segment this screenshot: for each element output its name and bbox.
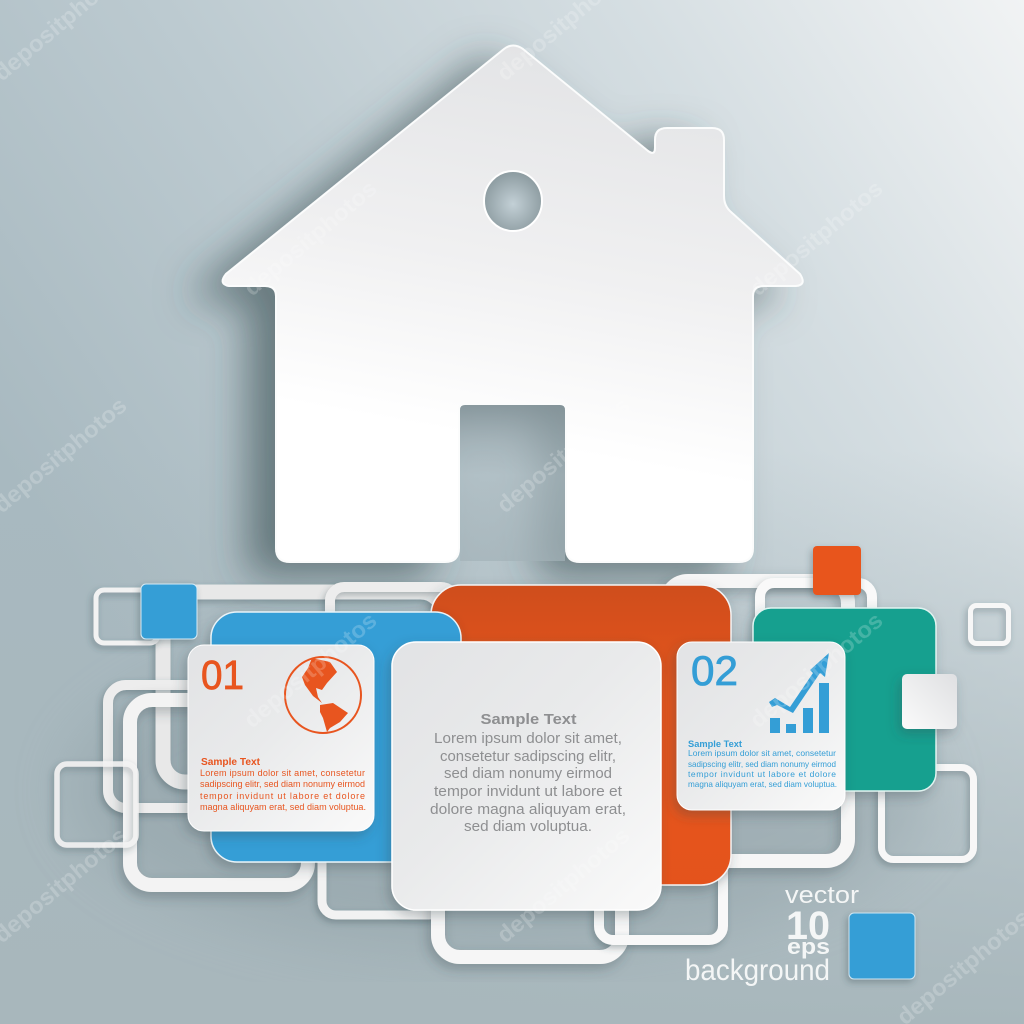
house: [223, 46, 803, 562]
background lower tone: [0, 450, 1024, 1024]
panel: orange: [431, 585, 731, 885]
text block: grey body: tempor invidunt ut labore et: [434, 784, 622, 800]
text block: grey body: sed diam voluptua.: [464, 819, 592, 835]
card 01: [188, 645, 374, 831]
card 02: [677, 642, 845, 810]
badge: vector 10 eps background: 10: [786, 904, 830, 948]
text block: grey body: dolore magna aliquyam erat,: [430, 802, 626, 818]
panel: blue: [211, 612, 461, 862]
rings behind the panels: [96, 581, 1008, 957]
number 01: 01: [201, 652, 244, 698]
heading: sample text grey: Sample Text: [480, 712, 577, 728]
watermarks: depositphotos: [745, 175, 888, 301]
card centre: [392, 642, 661, 910]
badge: vector 10 eps background: vector: [785, 882, 859, 909]
badge: vector 10 eps background: background: [685, 954, 830, 987]
ring: small left overlay: [57, 764, 136, 845]
badge: vector 10 eps background: eps: [787, 934, 830, 959]
ring: bottom centre: [438, 780, 622, 957]
text block: grey body: [430, 731, 626, 835]
ring: centre lower: [322, 770, 443, 915]
ring: small top left: [96, 590, 158, 643]
ring: lower right: [882, 768, 974, 860]
text block: blue body: tempor invidunt ut labore et dolore: [688, 769, 836, 779]
text block: orange body: sadipscing elitr, sed diam nonumy eirmod: [200, 779, 365, 789]
square: blue badge: [849, 913, 915, 979]
house door opening: [460, 405, 565, 561]
square: orange small: [813, 546, 861, 595]
icon: globe: [285, 657, 361, 733]
watermarks: depositphotos: [745, 607, 888, 733]
text block: grey body: sed diam nonumy eirmod: [444, 766, 612, 782]
ring: right large: [666, 581, 848, 861]
house round window: [484, 171, 542, 231]
text block: grey body: consetetur sadipscing elitr,: [440, 749, 616, 765]
text block: blue body: [688, 748, 837, 789]
heading: sample text blue: Sample Text: [688, 739, 743, 750]
icon: rising chart: [769, 653, 829, 733]
text block: orange body: magna aliquyam erat, sed diam voluptua.: [200, 802, 366, 812]
ring: mid left: [108, 685, 298, 808]
panel: teal: [753, 608, 936, 791]
badge: vector 10 eps background: [685, 882, 859, 987]
text block: blue body: sadipscing elitr, sed diam nonumy eirmod: [688, 759, 836, 769]
text block: orange body: Lorem ipsum dolor sit amet, consetetur: [200, 768, 365, 778]
text block: grey body: Lorem ipsum dolor sit amet,: [434, 731, 622, 747]
watermarks: depositphotos: [239, 607, 382, 733]
square: white on teal: [902, 674, 957, 729]
ring: bottom right of centre: [599, 780, 723, 940]
watermarks: depositphotos: [492, 392, 635, 518]
ring: lower left large: [130, 700, 308, 885]
ring: large upper left: [163, 592, 443, 782]
ring: far right small: [970, 606, 1008, 644]
watermarks: depositphotos: [492, 822, 635, 948]
watermarks: depositphotos: [239, 175, 382, 301]
soft shadow beneath the graphic: [70, 630, 930, 950]
text block: blue body: Lorem ipsum dolor sit amet, consetetur: [688, 748, 836, 758]
text block: blue body: magna aliquyam erat, sed diam voluptua.: [688, 779, 837, 789]
heading: sample text orange: Sample Text: [201, 757, 261, 768]
text block: orange body: tempor invidunt ut labore et dolore: [200, 791, 365, 801]
ring: centre top: [330, 587, 455, 707]
number 02: 02: [691, 647, 738, 694]
square: blue small: [141, 584, 197, 639]
ring: upper right: [760, 583, 872, 673]
text block: orange body: [200, 768, 366, 812]
